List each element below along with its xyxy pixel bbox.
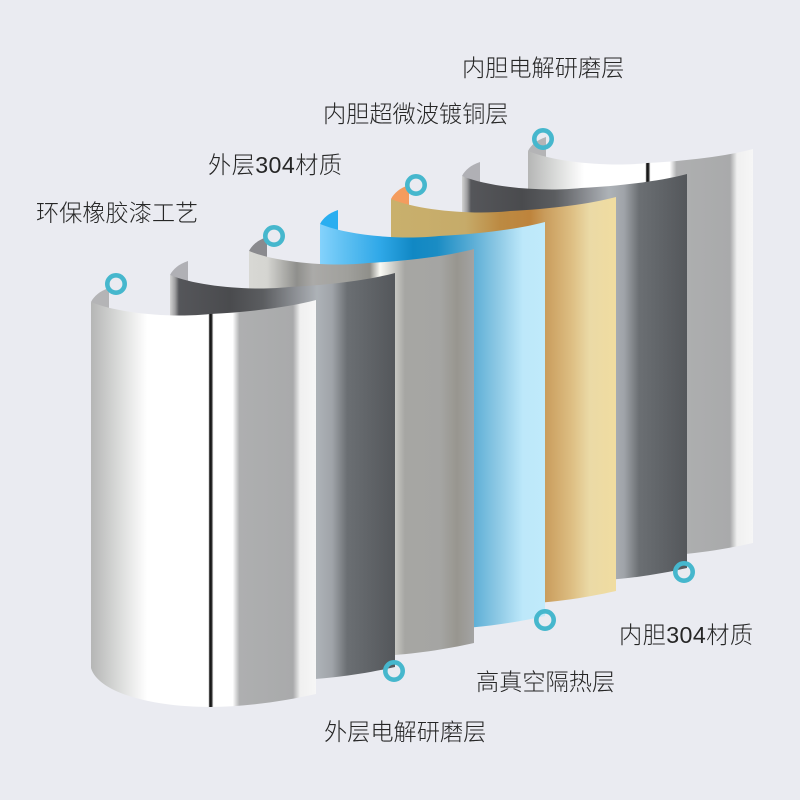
layer: inner copper plating [391, 185, 616, 604]
marker rings [107, 130, 693, 680]
label: 外层304材质: 外层304材质 [208, 152, 342, 178]
label: 内胆超微波镀铜层: 内胆超微波镀铜层 [323, 101, 508, 127]
layer: rubber paint coating [91, 288, 316, 707]
label: 环保橡胶漆工艺: 环保橡胶漆工艺 [36, 200, 198, 226]
layer: vacuum insulation [320, 210, 545, 629]
label: 内胆电解研磨层: 内胆电解研磨层 [462, 55, 624, 81]
layer: outer electrolytic polished [249, 237, 474, 656]
label: 高真空隔热层: 高真空隔热层 [476, 669, 615, 695]
label: 外层电解研磨层: 外层电解研磨层 [324, 719, 486, 745]
layer: inner electrolytic polished [528, 137, 753, 556]
layer: inner 304 steel [462, 162, 687, 581]
label: 内胆304材质: 内胆304材质 [619, 622, 753, 648]
layer: outer 304 steel [170, 261, 395, 680]
